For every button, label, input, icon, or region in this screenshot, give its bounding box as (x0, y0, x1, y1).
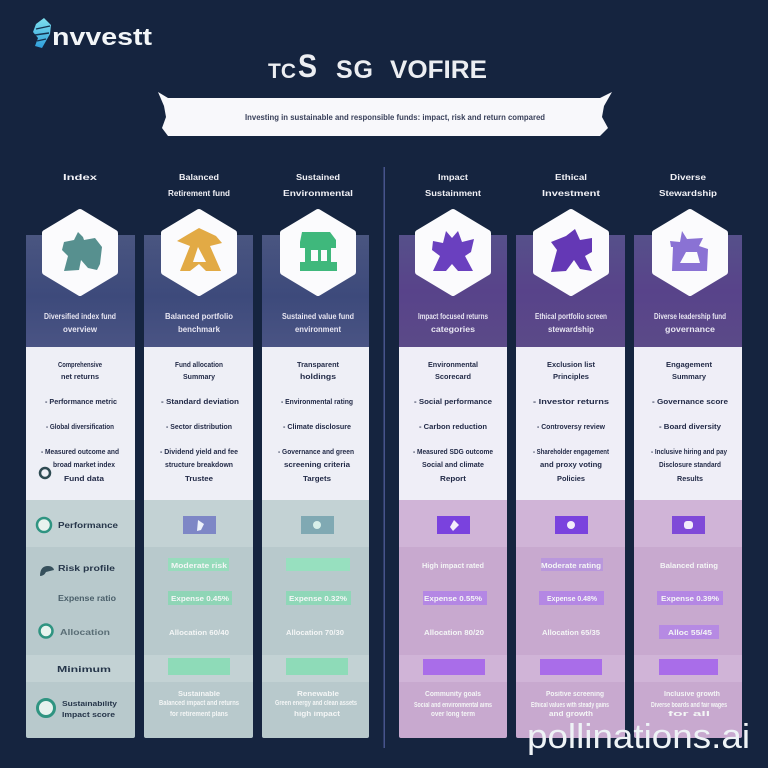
panel: column 1: Fund data (64, 474, 105, 483)
icon: teal dot (40, 624, 52, 638)
panel: column 1: Minimum (57, 665, 111, 674)
panel: column 3: - Governance and green (278, 447, 354, 456)
panel: column 1: Expense ratio (58, 594, 116, 603)
banner: Investing in sustainable and responsible funds: impact, risk and return compared (245, 113, 545, 122)
panel: column 5: - Shareholder engagement (533, 447, 609, 456)
panel: column 6: - Inclusive hiring and pay (651, 447, 728, 456)
column headings: Balanced (179, 173, 219, 182)
panel: column 3: Green energy and clean assets (275, 700, 357, 707)
panel: column 4: Social and environmental aims (414, 702, 492, 709)
panel: column 3: screening criteria (284, 460, 351, 469)
panel: column 3: Sustained value fund (282, 312, 354, 321)
panel: column 3: holdings (300, 372, 336, 381)
panel: column 5 (516, 212, 625, 738)
panel: column 6: for all (668, 711, 710, 718)
panel: column 6: Diverse leadership fund (654, 312, 726, 321)
panel: column 1: broad market index (53, 460, 116, 469)
panel: column 5: and growth (549, 711, 593, 718)
icon: blue pill (183, 516, 216, 534)
icon: teal emblem (62, 232, 102, 271)
panel: column 4: Report (440, 474, 467, 483)
icon: teal badge (38, 700, 54, 716)
column headings: Retirement fund (168, 189, 230, 198)
watermark: pollinations.ai (527, 718, 750, 756)
violet bars: Balanced rating (660, 561, 718, 570)
panel: column 1: Diversified index fund (44, 312, 116, 321)
icon: purple star emblem (432, 231, 474, 271)
panel: column 6: Summary (672, 372, 707, 381)
panel: column 1: Impact score (62, 712, 115, 719)
violet bars: High impact rated (422, 561, 484, 570)
panel: column 4: - Social performance (414, 397, 492, 406)
panel: column 2: for retirement plans (170, 711, 228, 718)
panel: column 5: Ethical portfolio screen (535, 312, 607, 321)
panel: column 1: net returns (61, 372, 99, 381)
icon: violet pill (437, 516, 470, 534)
divider (384, 167, 385, 748)
panel: column 3: Transparent (297, 360, 339, 369)
title (268, 48, 487, 84)
panel: column 2: Balanced impact and returns (159, 700, 239, 707)
icon: purple emblem (551, 229, 592, 272)
column headings: Sustainment (425, 189, 481, 198)
panel: column 1: - Global diversification (46, 422, 114, 431)
panel: column 3: - Environmental rating (281, 397, 353, 406)
panel: column 5: Principles (553, 372, 589, 381)
panel: column 4: - Carbon reduction (419, 422, 487, 431)
violet bars: Expense 0.39% (661, 594, 719, 603)
panel: column 2: benchmark (178, 325, 221, 334)
panel: column 6: Diverse boards and fair wages (651, 702, 727, 709)
violet bars: Expense 0.48% (547, 594, 597, 603)
panel: column 2: - Sector distribution (166, 422, 232, 431)
panel: column 4: over long term (431, 711, 475, 718)
column headings: Investment (542, 189, 600, 198)
banner (158, 92, 612, 136)
green bars: Moderate risk (171, 561, 228, 570)
panel: column 2: Sustainable (178, 691, 220, 698)
panel: column 2: Summary (183, 372, 216, 381)
title: VOFIRE (390, 56, 487, 84)
panel: column 1: Sustainability (62, 701, 117, 708)
panel: column 2: Trustee (185, 474, 213, 483)
icon: gold emblem (177, 228, 222, 271)
logo: nvvestt (52, 24, 152, 51)
panel: column 1: - Performance metric (45, 397, 117, 406)
violet bars: Alloc 55/45 (668, 628, 712, 637)
panel: column 6: governance (665, 325, 716, 334)
column headings (63, 173, 717, 198)
panel: column 5: Exclusion list (547, 360, 595, 369)
panel: column 3: Renewable (297, 691, 339, 698)
panel: column 1: Allocation (60, 628, 110, 637)
panel: column 1 (26, 212, 135, 738)
panel: column 4: Community goals (425, 691, 481, 698)
panel: column 2: - Standard deviation (161, 397, 239, 406)
panel: column 5: Ethical values with steady gains (531, 702, 609, 709)
panel: column 4: - Measured SDG outcome (413, 447, 493, 456)
panel: column 3: environment (295, 325, 341, 334)
panel: column 6: Disclosure standard (659, 460, 721, 469)
panel: column 2: - Dividend yield and fee (160, 447, 238, 456)
green bars (168, 558, 232, 675)
panel: column 2: Balanced portfolio (165, 312, 233, 321)
violet bars: Allocation 65/35 (542, 628, 600, 637)
panel: column 2: structure breakdown (165, 460, 233, 469)
panel: column 3: Targets (303, 474, 331, 483)
panel: column 2: Fund allocation (175, 360, 223, 369)
panel: column 1: Risk profile (58, 564, 116, 573)
column headings: Impact (438, 173, 468, 182)
panel: column 2 (144, 212, 253, 738)
violet bars (657, 561, 723, 675)
panel: column 6: Engagement (666, 360, 713, 369)
panel: column 3: high impact (294, 711, 341, 718)
title: SG (336, 56, 373, 84)
panel: column 6: - Governance score (652, 397, 728, 406)
column headings: Environmental (283, 189, 353, 198)
violet bars (539, 558, 604, 675)
icon: violet pill (672, 516, 705, 534)
panel: column 1: - Measured outcome and (41, 447, 119, 456)
column headings: Stewardship (659, 189, 717, 198)
icon: green building (300, 232, 337, 271)
panel: column 4: Social and climate (422, 460, 484, 469)
violet bars: Expense 0.55% (424, 594, 482, 603)
panel: column 4 (399, 212, 507, 738)
column headings: Ethical (555, 173, 587, 182)
icon: violet pill (555, 516, 588, 534)
logo (33, 18, 152, 51)
icon: teal ring (37, 518, 51, 532)
panel: column 5: Policies (557, 474, 585, 483)
panel: column 1: Comprehensive (58, 360, 102, 369)
title: TC (268, 60, 296, 83)
icon: cloud (40, 566, 54, 576)
panel: column 6: Inclusive growth (664, 691, 720, 698)
panel: column 6: - Board diversity (659, 422, 722, 431)
icon: teal pill (301, 516, 334, 534)
panel: column 5: and proxy voting (540, 460, 602, 469)
panel: column 4: Scorecard (435, 372, 471, 381)
column headings: Sustained (296, 173, 340, 182)
title: S (298, 48, 317, 84)
column headings: Index (63, 173, 98, 182)
green bars: Allocation 70/30 (286, 628, 344, 637)
panel: column 5: - Investor returns (533, 397, 609, 406)
panel: column 5: - Controversy review (537, 422, 605, 431)
icon: recycle ring (40, 468, 50, 478)
green bars: Allocation 60/40 (169, 628, 229, 637)
icon: lilac building (670, 231, 708, 271)
violet bars: Allocation 80/20 (424, 628, 484, 637)
panel: column 3: - Climate disclosure (283, 422, 351, 431)
panel: column 1: overview (63, 325, 98, 334)
green bars: Expense 0.45% (171, 594, 229, 603)
violet bars: Moderate rating (541, 561, 601, 570)
panel: column 6: Results (677, 474, 703, 483)
panel: column 6 (634, 212, 742, 738)
panel: column 5: stewardship (548, 325, 594, 334)
panel: column 4: Impact focused returns (418, 312, 488, 321)
panel: column 1: Performance (58, 521, 119, 530)
panel: column 4: categories (431, 325, 476, 334)
green bars (286, 558, 351, 675)
panel: column 3 (262, 212, 369, 738)
panel: column 4: Environmental (428, 360, 478, 369)
column headings: Diverse (670, 173, 707, 182)
green bars: Expense 0.32% (289, 594, 347, 603)
panel: column 5: Positive screening (546, 691, 604, 698)
violet bars (422, 561, 487, 675)
